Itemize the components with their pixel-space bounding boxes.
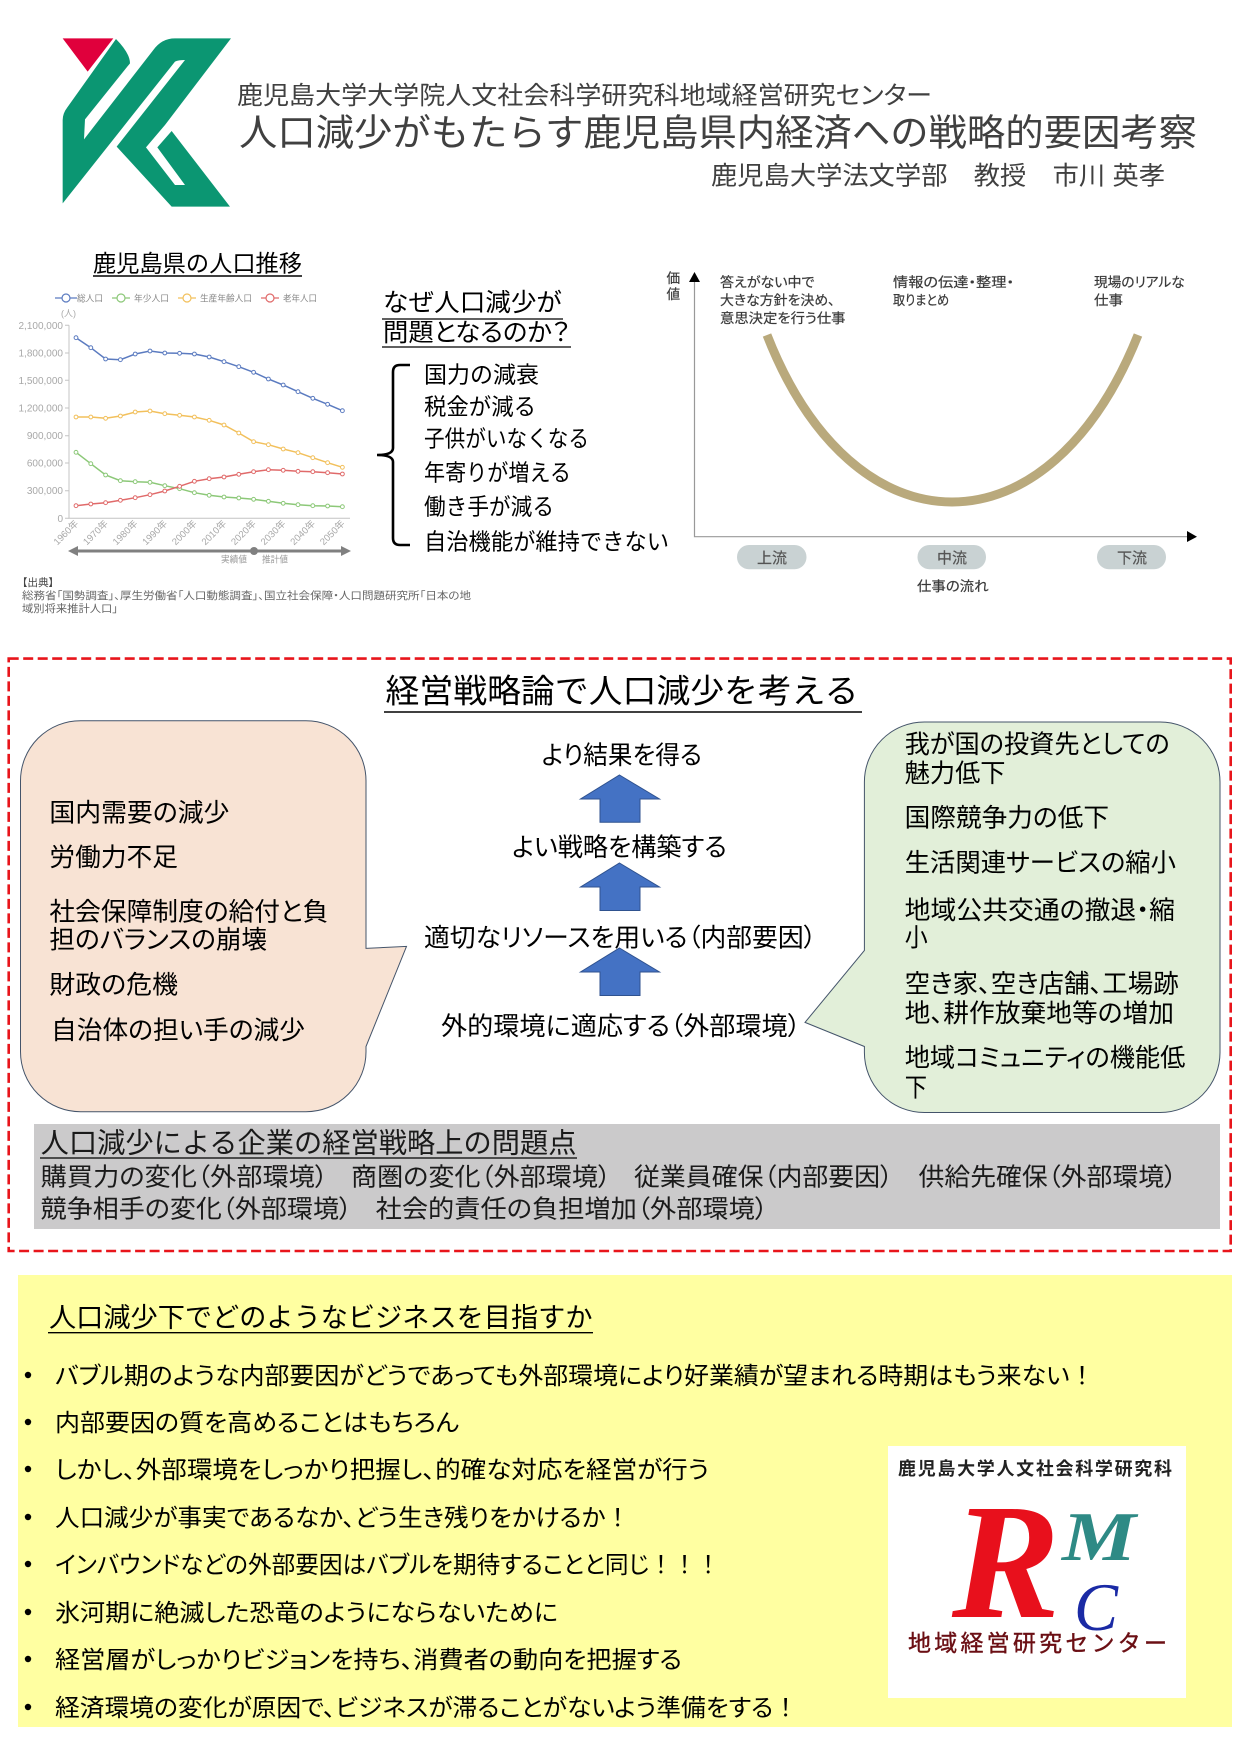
label: upstream work: 大きな方針を決め、 — [720, 293, 835, 308]
chart axes: 2000年 — [169, 517, 200, 548]
panel: management strategy — [9, 659, 1232, 1727]
chart source — [22, 576, 472, 615]
author: 鹿児島大学法文学部 教授 市川 英孝 — [711, 163, 1165, 191]
callout: impacts on demand and society: 労働力不足 — [49, 844, 178, 872]
issues heading: 人口減少による企業の経営戦略上の問題点 — [41, 1127, 576, 1158]
callout: impacts on demand and society: 財政の危機 — [49, 971, 178, 999]
label: upstream work — [720, 274, 846, 326]
bullet list: 内部要因の質を高めることはもちろん — [55, 1410, 459, 1437]
question heading: なぜ人口減少が — [383, 289, 562, 317]
callout: impacts on region: 生活関連サービスの縮小 — [905, 849, 1176, 877]
arrow: up 2 — [580, 863, 660, 910]
line: total population — [76, 338, 342, 411]
pill: upstream: 上流 — [757, 550, 787, 567]
main title: 人口減少がもたらす鹿児島県内経済への戦略的要因考察 — [239, 112, 1197, 154]
arrow: actual and projected span — [68, 546, 351, 564]
chart axes: 900,000 — [27, 431, 63, 442]
icon: RMC centre logo: 地域経営研究センター — [908, 1630, 1167, 1656]
icon: university logo — [63, 38, 231, 207]
label: downstream work: 現場のリアルな — [1094, 275, 1185, 290]
panel: business direction — [18, 1275, 1232, 1727]
chart axes — [18, 308, 350, 548]
chart axes: 1980年 — [110, 517, 141, 548]
issues list: 供給先確保（外部環境） — [918, 1163, 1177, 1191]
chart legend: 老年人口 — [283, 292, 317, 304]
chart axes: 2050年 — [317, 517, 348, 548]
reasons list: 税金が減る — [424, 394, 536, 420]
label: downstream work — [1094, 275, 1185, 308]
panel: corporate strategy issues — [34, 1124, 1220, 1229]
label: midstream work — [893, 275, 1014, 308]
reasons list: 自治機能が維持できない — [424, 528, 669, 554]
panel: smile curve diagram — [666, 271, 1197, 594]
line: elderly population — [76, 470, 342, 506]
question heading: 問題となるのか？ — [383, 319, 570, 347]
callout: impacts on region: 小 — [905, 924, 928, 952]
callout: impacts on demand and society: 社会保障制度の給付と負 — [49, 898, 328, 926]
panel: population chart — [18, 251, 472, 615]
arrow: actual and projected span: 実績値 — [221, 554, 247, 564]
line: youth population — [76, 452, 342, 507]
callout: impacts on demand and society — [20, 721, 406, 1112]
callout: impacts on demand and society: 自治体の担い手の減少 — [51, 1017, 305, 1045]
chart axes: 1970年 — [81, 517, 111, 548]
chart axes: 600,000 — [27, 458, 63, 470]
chart axes: 2,100,000 — [18, 321, 63, 332]
chart legend: 生産年齢人口 — [200, 292, 252, 304]
chart axes: (人) — [61, 308, 76, 318]
label: midstream work: 情報の伝達・整理・ — [893, 275, 1014, 290]
chart axes: 2040年 — [288, 517, 318, 548]
chart legend: 総人口 — [77, 292, 103, 304]
issues list: 競争相手の変化（外部環境） — [41, 1195, 352, 1223]
chart axes: 2010年 — [199, 517, 229, 548]
callout: impacts on region: 空き家、空き店舗、工場跡 — [905, 970, 1179, 998]
icon: RMC centre logo: C — [1074, 1569, 1119, 1645]
issues list: 商圏の変化（外部環境） — [351, 1163, 611, 1191]
step: use resources: 適切なリソースを用いる（内部要因） — [424, 924, 816, 952]
panel: why population decline is a problem — [377, 289, 669, 554]
organisation name: 鹿児島大学大学院人文社会科学研究科地域経営研究センター — [237, 82, 932, 110]
label: midstream work: 取りまとめ — [893, 293, 949, 308]
axis label: value: 価 — [666, 271, 680, 286]
callout: impacts on region: 下 — [905, 1074, 927, 1102]
chart axes: 1,200,000 — [18, 404, 63, 414]
bullet list: しかし、外部環境をしっかり把握し、的確な対応を経営が行う — [55, 1457, 709, 1484]
axis label: value: 値 — [666, 287, 680, 302]
icon: RMC centre logo — [888, 1446, 1186, 1698]
reasons list: 年寄りが増える — [424, 460, 571, 486]
chart axes: 300,000 — [27, 486, 63, 497]
icon: RMC centre logo: 鹿児島大学人文社会科学研究科 — [898, 1458, 1172, 1479]
chart axes: 1990年 — [140, 517, 170, 548]
pill: midstream — [918, 545, 986, 569]
callout: impacts on region: 地域コミュニティの機能低 — [905, 1044, 1185, 1072]
callout: impacts on region: 魅力低下 — [905, 760, 1006, 788]
step: build good strategy: よい戦略を構築する — [512, 834, 727, 862]
chart legend: 年少人口 — [134, 292, 169, 304]
step: get better results: より結果を得る — [542, 742, 702, 770]
pill: downstream: 下流 — [1117, 550, 1147, 567]
callout: impacts on region: 地、耕作放棄地等の増加 — [905, 1000, 1174, 1028]
chart axes: 2020年 — [229, 517, 259, 548]
issues list — [41, 1163, 1177, 1223]
bullet list: 経済環境の変化が原因で、ビジネスが滞ることがないよう準備をする ！ — [55, 1695, 798, 1722]
business heading: 人口減少下でどのようなビジネスを目指すか — [49, 1303, 592, 1333]
callout: impacts on region: 我が国の投資先としての — [905, 731, 1170, 759]
question heading — [382, 289, 571, 347]
callout: impacts on region: 地域公共交通の撤退・縮 — [905, 897, 1175, 925]
dashed frame — [9, 659, 1231, 1251]
bullet list: 人口減少が事実であるなか、どう生き残りをかけるか ！ — [55, 1505, 630, 1532]
brace — [377, 365, 410, 545]
bullet list: 経営層がしっかりビジョンを持ち、消費者の動向を把握する — [55, 1647, 682, 1674]
callout: impacts on region — [805, 722, 1220, 1112]
chart axes: 1,500,000 — [18, 376, 63, 387]
reasons list: 子供がいなくなる — [424, 426, 589, 452]
chart axes: 1960年 — [51, 517, 81, 548]
issues list: 社会的責任の負担増加（外部環境） — [376, 1195, 768, 1223]
pill: upstream — [737, 545, 806, 569]
chart source: 域別将来推計人口」 — [22, 602, 118, 615]
bullet list: 氷河期に絶滅した恐竜のようにならないために — [55, 1600, 558, 1627]
chart heading: 鹿児島県の人口推移 — [93, 251, 302, 277]
axis label: value — [666, 271, 680, 302]
issues list: 従業員確保（内部要因） — [634, 1163, 893, 1191]
chart axes: 2030年 — [258, 517, 289, 548]
chart axes: 1,800,000 — [18, 348, 63, 360]
pill: midstream: 中流 — [937, 550, 967, 567]
pill: downstream — [1097, 545, 1166, 569]
callout: impacts on region: 国際競争力の低下 — [905, 804, 1109, 832]
bullet list — [25, 1363, 1094, 1722]
chart axes: 0 — [57, 514, 63, 525]
bullet list: バブル期のような内部要因がどうであっても外部環境により好業績が望まれる時期はもう来ない ！ — [55, 1363, 1094, 1390]
arrow: up 1 — [580, 775, 660, 822]
chart source: 総務省「国勢調査」、厚生労働省「人口動態調査」、国立社会保障・人口問題研究所「日本の地 — [22, 589, 472, 602]
header block — [237, 82, 1197, 191]
reasons list — [424, 362, 669, 554]
callout: impacts on demand and society: 担のバランスの崩壊 — [49, 927, 267, 955]
icon: RMC centre logo: M — [1061, 1499, 1139, 1576]
label: upstream work: 答えがない中で — [720, 274, 814, 290]
label: upstream work: 意思決定を行う仕事 — [720, 311, 846, 326]
step: adapt to environment: 外的環境に適応する（外部環境） — [441, 1013, 801, 1041]
arrow: up 3 — [580, 948, 660, 996]
line: working-age population — [76, 411, 342, 467]
chart legend — [55, 292, 317, 304]
chart source: 【出典】 — [22, 576, 54, 589]
label: downstream work: 仕事 — [1094, 293, 1123, 308]
flow: strategy ladder — [424, 742, 816, 1041]
value curve — [767, 335, 1138, 502]
axis label: work flow: 仕事の流れ — [917, 579, 989, 594]
issues list: 購買力の変化（外部環境） — [41, 1163, 328, 1191]
icon: RMC centre logo: R — [951, 1470, 1060, 1653]
section heading: 経営戦略論で人口減少を考える — [386, 673, 858, 710]
reasons list: 国力の減衰 — [424, 362, 539, 388]
arrow: actual and projected span: 推計値 — [262, 554, 288, 564]
callout: impacts on demand and society: 国内需要の減少 — [49, 799, 229, 827]
reasons list: 働き手が減る — [424, 494, 554, 520]
diagram axes — [689, 272, 1197, 542]
bullet list: インバウンドなどの外部要因はバブルを期待することと同じ！！！ — [55, 1552, 720, 1579]
